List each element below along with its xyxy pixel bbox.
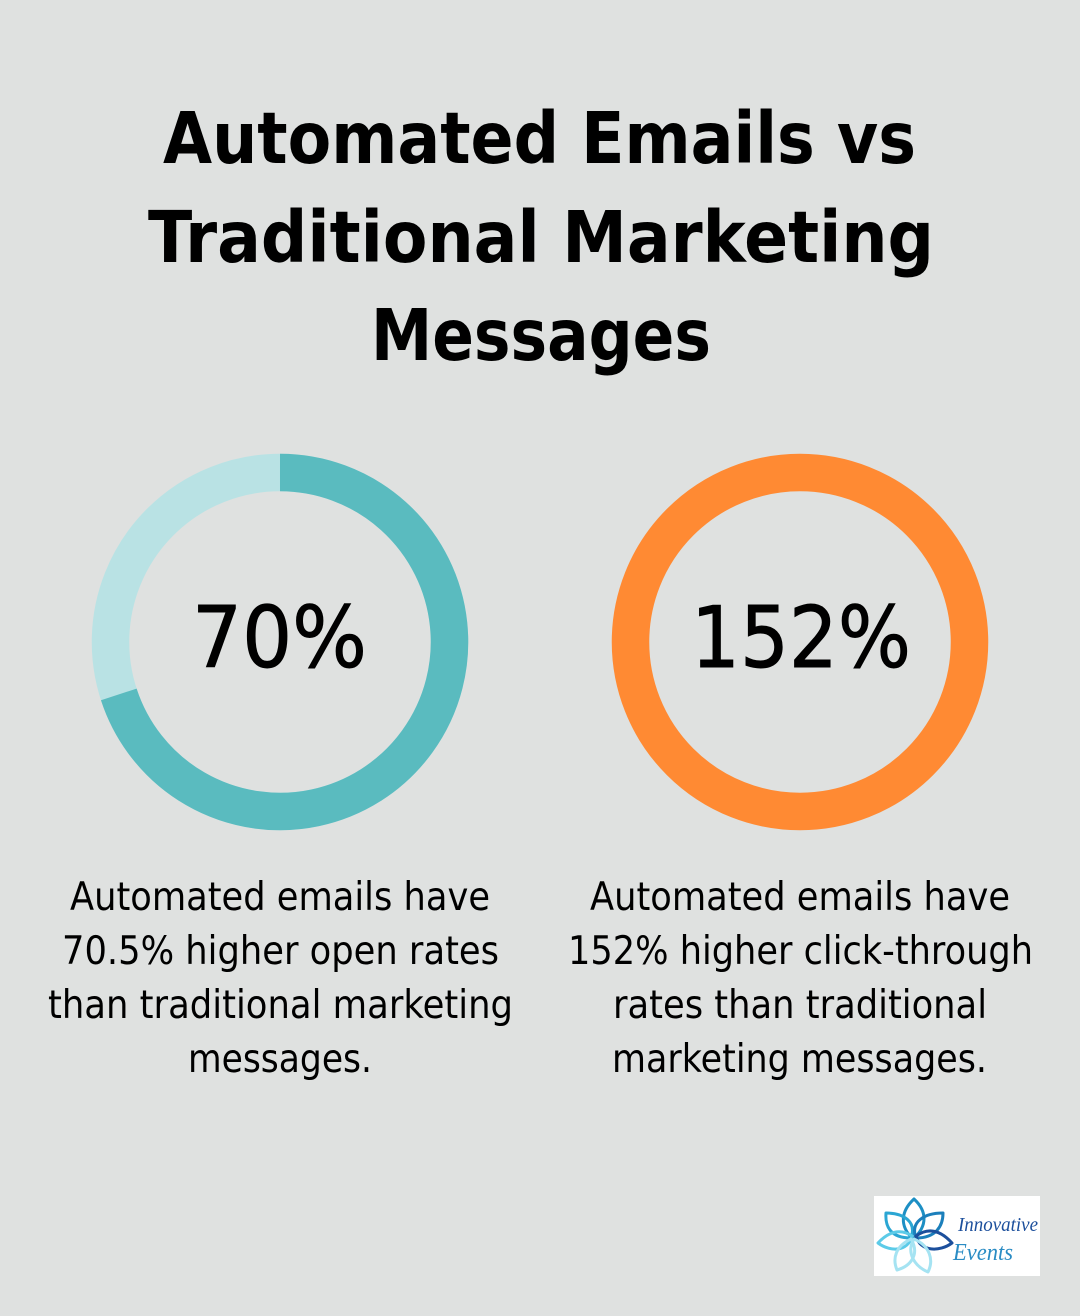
description: open rates	[48, 875, 513, 1082]
description: click-through rates: rates than traditional	[613, 983, 987, 1028]
panel: 152% click-through rates	[568, 472, 1033, 1082]
description: click-through rates: Automated emails have	[590, 875, 1010, 920]
title: Automated Emails vs	[163, 97, 916, 180]
title	[148, 97, 934, 377]
logo wordmark	[952, 1214, 1038, 1266]
description: click-through rates: 152% higher click-through	[568, 929, 1033, 974]
icon: lotus flower	[878, 1199, 952, 1272]
stat: 152%: 152%	[691, 589, 911, 688]
stat: 70%: 70%	[192, 589, 367, 688]
panel: 70% open rates	[48, 472, 513, 1082]
logo wordmark: Events	[952, 1240, 1013, 1266]
title: Traditional Marketing	[148, 196, 934, 279]
donut chart: 152%	[630, 472, 970, 812]
description: open rates: messages.	[188, 1037, 372, 1082]
description: click-through rates	[568, 875, 1033, 1082]
description: open rates: than traditional marketing	[48, 983, 513, 1028]
description: open rates: 70.5% higher open rates	[62, 929, 499, 974]
description: open rates: Automated emails have	[70, 875, 490, 920]
description: click-through rates: marketing messages.	[612, 1037, 987, 1082]
logo: Innovative Events	[874, 1196, 1040, 1276]
title: Messages	[371, 294, 711, 377]
logo wordmark: Innovative	[957, 1214, 1038, 1236]
donut chart: 70%	[110, 472, 450, 812]
